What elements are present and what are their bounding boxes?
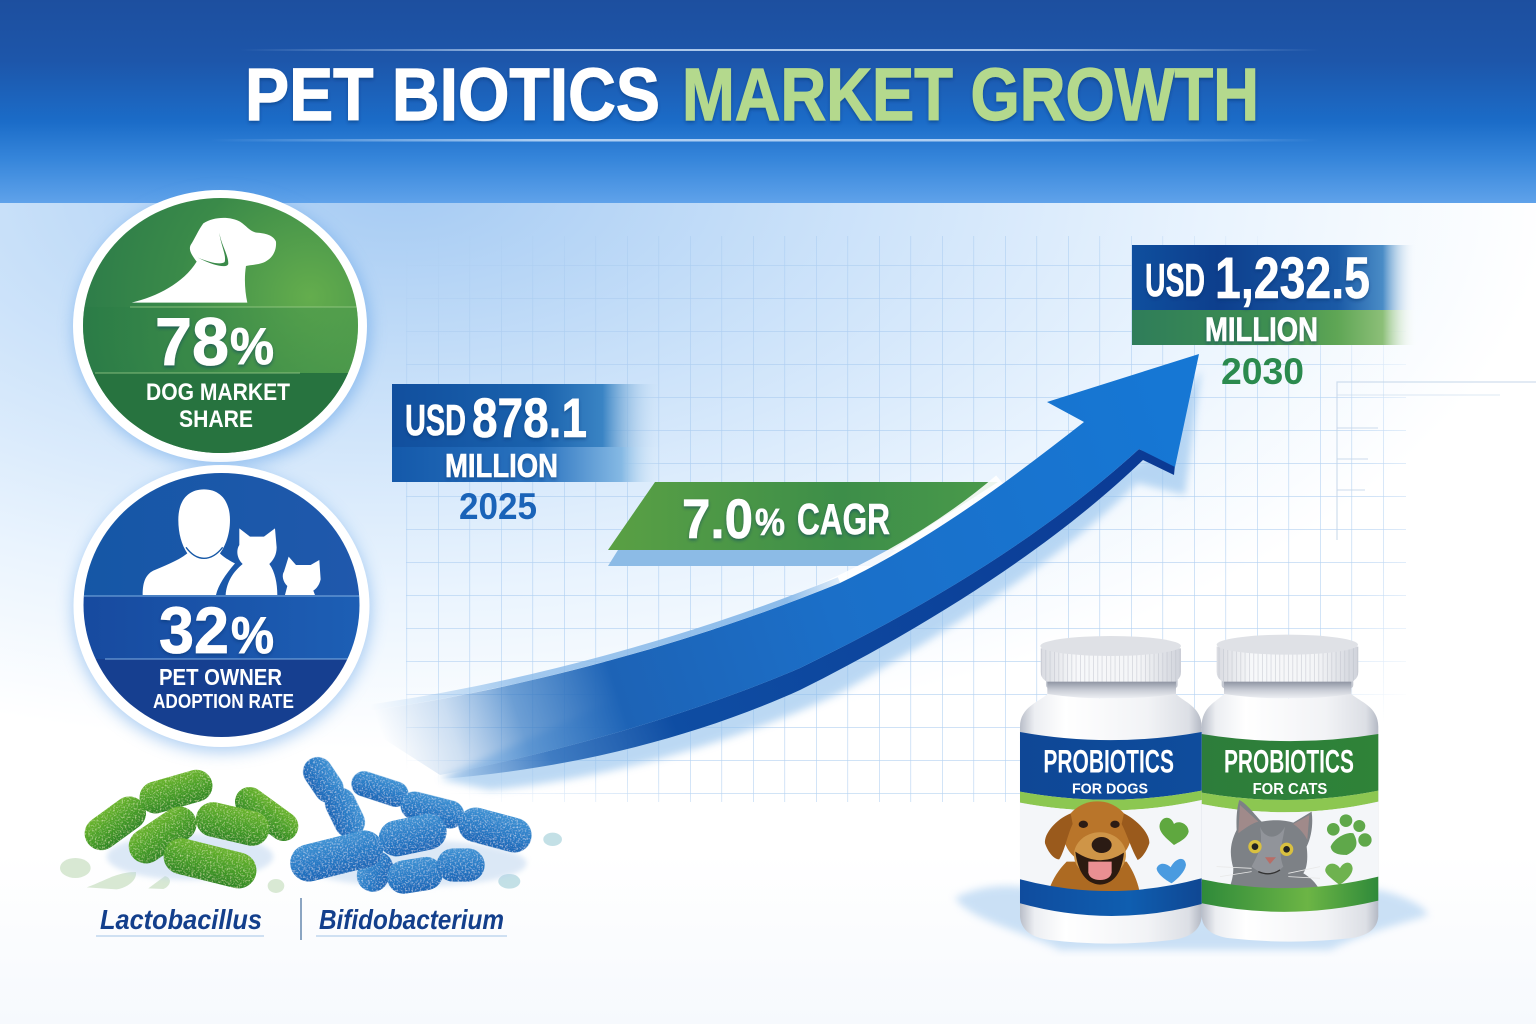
- dog bottle: [1020, 636, 1202, 944]
- title: MARKET GROWTH: [682, 53, 1259, 136]
- label top band: [392, 384, 662, 447]
- label lime stripe: [1020, 791, 1202, 811]
- arrow highlight edge: [344, 580, 839, 711]
- growth arrow: [344, 354, 1199, 779]
- label white panel: [1202, 802, 1378, 889]
- label white panel: [1020, 800, 1202, 892]
- circle halo: [73, 470, 371, 752]
- bottle neck: [1224, 682, 1351, 698]
- lower band: [1202, 877, 1378, 912]
- banner shape: [608, 482, 998, 550]
- icon: blue heart: [1157, 859, 1186, 883]
- stat 32%: [159, 593, 274, 667]
- product name: cats: PROBIOTICS: [1224, 743, 1354, 779]
- label lower band: [392, 447, 662, 482]
- bottles: [1020, 635, 1378, 944]
- divider: [300, 898, 302, 940]
- lower band: [1020, 878, 1202, 916]
- illustration: dog: [1045, 801, 1149, 898]
- label: bifidobacterium: Bifidobacterium: [319, 904, 504, 935]
- bottle cap: [1040, 636, 1181, 688]
- caption: dog market share: SHARE: [179, 406, 253, 433]
- caption: pet owner adoption rate: ADOPTION RATE: [153, 691, 294, 713]
- icon: dog: [132, 218, 276, 303]
- amount: 1,232.5: [1215, 246, 1370, 311]
- CAGR value: 7.0: [682, 487, 753, 550]
- product name: dogs: [1043, 743, 1174, 797]
- amount: USD: [1145, 254, 1205, 306]
- floor fade: [0, 780, 1536, 1024]
- stat circle: dog market share: [73, 190, 370, 466]
- title: [245, 53, 1259, 136]
- icon: green heart: [1160, 818, 1189, 845]
- bottle ground shadow: [955, 886, 1428, 950]
- bottle cap: [1217, 635, 1358, 688]
- label: lactobacillus: Lactobacillus: [100, 904, 262, 935]
- header band: [0, 0, 1536, 203]
- stat 78%: %: [230, 318, 274, 376]
- bifidobacterium cluster: [286, 751, 535, 897]
- bottle body: [1020, 694, 1202, 944]
- year 2025: 2025: [459, 486, 537, 527]
- arrow body: [345, 354, 1199, 775]
- arrow cast shadow: [440, 370, 1201, 790]
- title: PET BIOTICS: [245, 53, 660, 136]
- arrow dark underside: [440, 449, 1175, 779]
- year 2030: 2030: [1221, 351, 1304, 392]
- CAGR value: [682, 487, 890, 550]
- product name: dogs: PROBIOTICS: [1043, 743, 1174, 779]
- lactobacillus cluster: [78, 766, 304, 892]
- product name: cats: FOR CATS: [1253, 781, 1327, 798]
- amount: MILLION: [445, 447, 558, 484]
- amount: USD: [405, 396, 466, 445]
- label top band: [1132, 245, 1417, 310]
- capsule shadows: [107, 833, 527, 887]
- pale droplets: [60, 858, 284, 893]
- CAGR banner: [608, 482, 998, 566]
- bacteria illustration: [60, 751, 562, 897]
- stat circle: pet owner adoption: [73, 465, 371, 752]
- circle ring: [74, 465, 370, 747]
- icon: heart: [1325, 863, 1353, 885]
- caption: dog market share: DOG MARKET: [146, 379, 290, 406]
- pale blue droplets: [498, 833, 562, 889]
- bottle body: [1202, 694, 1378, 942]
- CAGR value: %: [755, 502, 785, 544]
- label blue: [1020, 732, 1202, 800]
- amount: [405, 386, 587, 484]
- cat bottle: [1202, 635, 1378, 942]
- circle halo: [74, 194, 370, 466]
- banner shadow: [608, 550, 896, 566]
- bottle neck: [1047, 682, 1176, 698]
- label green: [1202, 734, 1378, 800]
- label lower band: [1132, 310, 1417, 345]
- amount: MILLION: [1205, 311, 1318, 349]
- header rules: [210, 49, 1320, 142]
- chart corner frame: [1337, 382, 1536, 540]
- icon: owner with pets: [143, 489, 321, 595]
- caption: pet owner adoption rate: PET OWNER: [159, 664, 282, 690]
- caption: pet owner adoption rate: [153, 664, 294, 713]
- product name: cats: [1224, 743, 1354, 798]
- icon: paw: [1327, 814, 1372, 855]
- circle fill: [80, 195, 365, 458]
- amount: 878.1: [472, 386, 587, 449]
- illustration: cat: [1217, 800, 1322, 895]
- arrow top glow: [760, 480, 1000, 616]
- stat 78%: 78: [155, 304, 229, 380]
- value label 2025: [392, 384, 662, 527]
- label lime stripe: [1202, 791, 1378, 812]
- stat 78%: [155, 304, 274, 380]
- CAGR value: CAGR: [797, 495, 890, 544]
- circle ring: [73, 190, 367, 462]
- caption: dog market share: [146, 379, 290, 433]
- stat 32%: %: [231, 607, 274, 665]
- product name: dogs: FOR DOGS: [1072, 781, 1148, 797]
- circle fill: [80, 470, 365, 741]
- stat 32%: 32: [159, 593, 229, 667]
- amount: [1145, 246, 1370, 349]
- chart grid: [406, 236, 1406, 802]
- value label 2030: [1132, 245, 1417, 392]
